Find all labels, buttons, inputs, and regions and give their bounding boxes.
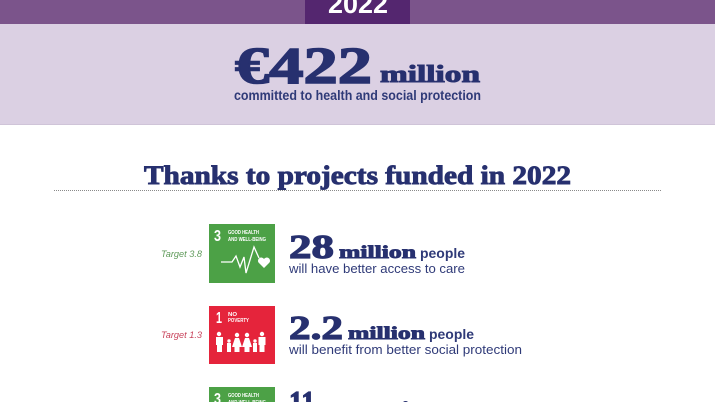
section heading: Thanks to projects funded in 2022 <box>144 161 571 190</box>
icon: SDG 1 no poverty <box>209 306 275 364</box>
stat: 28 million people <box>288 229 465 276</box>
panel: header band <box>0 0 715 24</box>
icon: SDG 1 no poverty: 1 <box>216 310 222 327</box>
stat: 11 countries, cropped <box>289 385 433 402</box>
year tab <box>305 0 410 24</box>
stat: 28 million people: million <box>339 242 416 262</box>
icon: SDG 3 good health: AND WELL-BEING <box>228 237 266 243</box>
headline amount: €422 <box>235 38 372 95</box>
stat: 2.2 million people: 2.2 <box>289 310 343 347</box>
stat: 2.2 million people: million <box>348 323 425 343</box>
icon: SDG 1 no poverty: NO <box>228 312 238 318</box>
icon: SDG 3 good health <box>209 224 275 283</box>
target label 3.8: Target 3.8 <box>161 249 203 260</box>
headline caption: committed to health and social protection <box>234 87 481 103</box>
icon: SDG 3 good health: GOOD HEALTH <box>228 230 259 236</box>
icon: SDG 3 good health, cropped <box>209 387 275 402</box>
target label 1.3: Target 1.3 <box>161 330 203 341</box>
row: countries (cut off) <box>209 385 433 402</box>
stat: 28 million people: people <box>420 245 465 261</box>
icon: SDG 3 good health: 3 <box>214 228 221 245</box>
headline amount <box>235 38 480 95</box>
stat: 28 million people: will have better access to care <box>288 261 465 276</box>
stat: 2.2 million people: people <box>429 326 474 342</box>
row: access to care <box>161 224 465 283</box>
stat: 2.2 million people: will benefit from better social protection <box>288 342 522 357</box>
headline amount: million <box>380 62 480 88</box>
panel: headline commitment <box>0 24 715 125</box>
icon: SDG 3 good health, cropped: GOOD HEALTH <box>228 393 259 399</box>
icon: SDG 1 no poverty: POVERTY <box>228 318 249 324</box>
stat: 2.2 million people <box>288 310 522 357</box>
row: social protection <box>161 306 522 364</box>
stat: 28 million people: 28 <box>289 229 334 266</box>
